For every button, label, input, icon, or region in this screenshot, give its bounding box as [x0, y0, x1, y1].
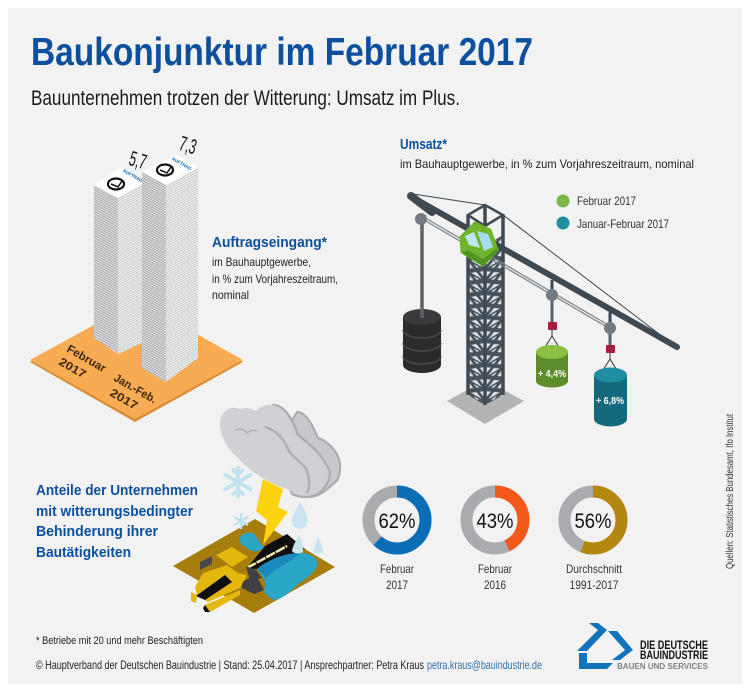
- donut: Februar 2017 62%: [368, 492, 426, 592]
- text block: Auftragseingang: Auftragseingang*: [212, 234, 327, 251]
- logo: Die Deutsche Bauindustrie: BAUEN UND SERVICES: [617, 662, 709, 671]
- donut: Durchschnitt 1991-2017 56%: [564, 492, 623, 592]
- donut: Durchschnitt 1991-2017 56%: Durchschnitt: [566, 562, 623, 576]
- weight: Februar 2017 +4,4%: [536, 289, 568, 388]
- value 7,3: 7,3: [176, 132, 199, 159]
- lightning bolt: [256, 479, 288, 545]
- logo: Die Deutsche Bauindustrie: [577, 623, 709, 671]
- label Februar 2017: [56, 343, 108, 381]
- cab: [461, 223, 497, 266]
- text block: Umsatz: Umsatz*: [400, 136, 447, 153]
- construction ground: [173, 519, 335, 613]
- counterweight: [403, 213, 441, 373]
- donut: Februar 2016 43%: 2016: [484, 578, 506, 592]
- text block: Anteile der Unternehmen: Behinderung ihrer: [36, 523, 158, 540]
- text block: Anteile der Unternehmen: Bautätigkeiten: [36, 544, 131, 561]
- illustration: storm over construction site: [173, 405, 340, 613]
- donut: Durchschnitt 1991-2017 56%: 56%: [574, 509, 612, 533]
- logo: Die Deutsche Bauindustrie: DIE DEUTSCHE: [640, 640, 708, 652]
- crane base plate: [447, 380, 524, 424]
- label Jan.-Feb. 2017: 2017: [108, 387, 139, 413]
- text block: Auftragseingang: im Bauhauptgewerbe,: [212, 255, 311, 269]
- text block: Auftragseingang: [212, 234, 338, 302]
- support cables: [413, 194, 667, 340]
- snowflake large: [224, 466, 252, 498]
- excavator: [191, 556, 264, 612]
- legend: Umsatz: Februar 2017: [577, 194, 636, 208]
- text block: Umsatz: im Bauhauptgewerbe, in % zum Vorjahreszeitraum, nominal: [400, 157, 694, 171]
- crane tower: [468, 205, 503, 405]
- label Februar 2017: 2017: [56, 356, 88, 381]
- subtitle: Bauunternehmen trotzen der Witterung: Umsatz im Plus.: [31, 87, 460, 110]
- chart: crane with Umsatz weights: [403, 194, 677, 426]
- snowflake small: [234, 513, 248, 529]
- paper stack: Februar 2017: [94, 168, 144, 354]
- paper stack: Februar 2017: AUFTRAG: [122, 168, 144, 184]
- cloud: [220, 405, 340, 497]
- donut: Durchschnitt 1991-2017 56%: 1991-2017: [570, 578, 619, 592]
- text block: Anteile der Unternehmen: Anteile der Unternehmen: [36, 482, 198, 499]
- gold patch: [216, 547, 248, 567]
- donut: Februar 2016 43%: Februar: [478, 562, 512, 576]
- donut: Februar 2016 43%: [466, 492, 524, 592]
- paper stack: Jan.-Feb. 2017: [142, 155, 198, 382]
- title: Baukonjunktur im Februar 2017: [31, 31, 533, 74]
- label Februar 2017: Februar: [64, 343, 108, 375]
- road marking: [247, 546, 287, 568]
- panel: Auftragseingang stacks: [30, 132, 243, 422]
- text block: Auftragseingang: in % zum Vorjahreszeitraum,: [212, 272, 338, 286]
- paper stack: Jan.-Feb. 2017: AUFTRAG: [171, 156, 193, 172]
- text block: Auftragseingang: nominal: [212, 288, 249, 302]
- text block: Anteile der Unternehmen: mit witterungsbedingter: [36, 503, 193, 520]
- lower rail: [422, 216, 612, 330]
- legend: Umsatz: [556, 194, 669, 231]
- text block: Umsatz: [400, 136, 694, 171]
- text block: Anteile der Unternehmen: [36, 482, 198, 561]
- legend: Umsatz: Januar-Februar 2017: [577, 217, 669, 231]
- source note: Quellen: Statistisches Bundesamt, Ifo Institut: [724, 414, 736, 569]
- value 5,7: 5,7: [126, 147, 149, 174]
- footer credit: © Hauptverband der Deutschen Bauindustrie | Stand: 25.04.2017 | Ansprechpartner: Petra Kraus: [36, 658, 424, 672]
- orange base plate: [30, 301, 243, 422]
- logo: Die Deutsche Bauindustrie: BAUINDUSTRIE: [640, 650, 708, 662]
- label Jan.-Feb. 2017: Jan.-Feb.: [112, 372, 158, 406]
- donut: Februar 2017 62%: Februar: [380, 562, 414, 576]
- weight: Februar 2017 +4,4%: + 4,4%: [538, 368, 567, 380]
- crane jib: [411, 196, 677, 347]
- donut: Februar 2017 62%: 2017: [386, 578, 408, 592]
- weight: Januar-Februar 2017 +6,8%: + 6,8%: [596, 395, 625, 407]
- donut: Februar 2017 62%: 62%: [378, 509, 416, 533]
- footnote: * Betriebe mit 20 und mehr Beschäftigten: [36, 635, 203, 647]
- road: [247, 534, 305, 570]
- puddle: [240, 532, 264, 551]
- donut: Februar 2016 43%: 43%: [476, 509, 514, 533]
- weight: Januar-Februar 2017 +6,8%: [594, 322, 627, 426]
- footer credit: petra.kraus@bauindustrie.de: [427, 658, 542, 672]
- rain drops: [292, 502, 323, 554]
- water: [257, 553, 317, 600]
